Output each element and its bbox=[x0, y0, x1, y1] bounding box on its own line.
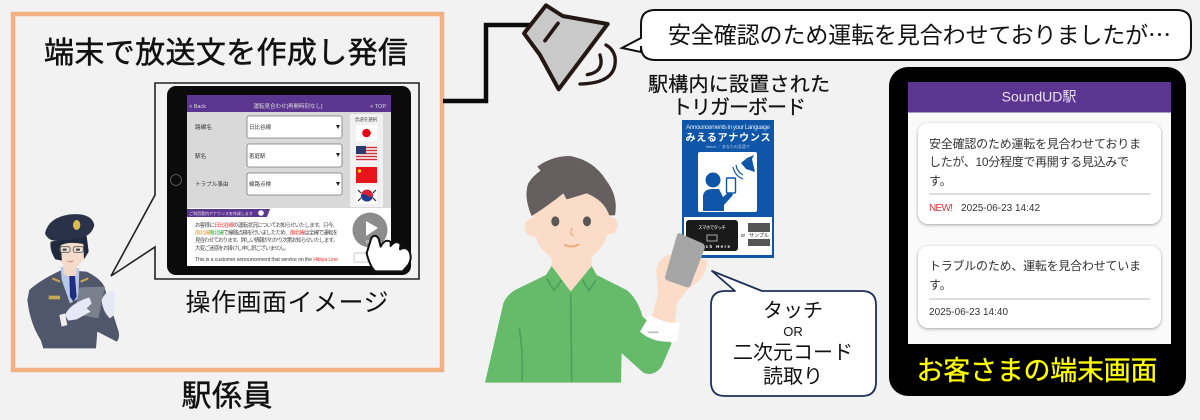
message card: latest: 安全確認のため運転を見合わせておりま bbox=[929, 136, 1141, 151]
callout: touch or QR code: 二次元コード bbox=[733, 341, 853, 364]
message card: latest bbox=[918, 123, 1161, 224]
label: trigger board bbox=[648, 73, 830, 119]
message card: earlier: 2025-06-23 14:40 bbox=[929, 307, 1008, 318]
hair bbox=[526, 156, 616, 216]
device header bbox=[908, 82, 1171, 112]
speech bubble: announcement: 安全確認のため運転を見合わせておりましたが… bbox=[668, 16, 1171, 50]
customer device bbox=[889, 67, 1186, 396]
announcement text band bbox=[187, 209, 270, 217]
illustration: station staff bbox=[27, 214, 119, 348]
announcement text: お客様に日比谷線の運転状況についてお知らせいたします。只今、 bbox=[195, 221, 338, 229]
hand bbox=[652, 255, 707, 325]
illustration: customer with smartphone bbox=[485, 156, 707, 383]
device header: SoundUD駅 bbox=[1002, 89, 1076, 105]
connection wire bbox=[443, 25, 530, 101]
trigger board poster bbox=[682, 120, 774, 258]
tablet app header bbox=[187, 95, 391, 112]
shirt bbox=[485, 266, 672, 383]
announcement text band: ご利用案内アナウンスを作成します bbox=[189, 210, 253, 216]
message card: earlier: トラブルのため、運転を見合わせていま bbox=[929, 258, 1141, 273]
head bbox=[525, 218, 543, 237]
neck bbox=[552, 248, 592, 293]
trigger board poster: スマホでタッチ bbox=[698, 224, 726, 231]
message card: latest: す。 bbox=[929, 174, 952, 188]
tablet app header: < Back bbox=[189, 104, 206, 110]
tablet form: 線路点検 bbox=[249, 180, 272, 188]
label: trigger board: 駅構内に設置された bbox=[648, 73, 830, 96]
tablet app header: < TOP bbox=[370, 104, 386, 110]
label: station staff: 駅係員 bbox=[182, 380, 272, 413]
language flags: 言語を選択 bbox=[355, 116, 378, 123]
message card: earlier bbox=[918, 246, 1161, 328]
tablet form: 路線名 bbox=[195, 123, 212, 131]
trigger board poster: Announcements in your Language bbox=[686, 124, 770, 131]
trigger board poster: Touch Here bbox=[694, 244, 730, 249]
trigger board poster: サンプル bbox=[749, 233, 769, 239]
label: trigger board: トリガーボード bbox=[672, 96, 806, 119]
announcement text: 見合わせております。詳しい情報がわかり次第お知らせいたします。 bbox=[195, 236, 338, 244]
language flags bbox=[350, 114, 383, 207]
play button bbox=[352, 212, 388, 262]
message card: latest: したが、10分程度で再開する見込みで bbox=[929, 154, 1129, 169]
message card: latest: 2025-06-23 14:42 bbox=[961, 203, 1040, 214]
icon: speaker bbox=[524, 5, 615, 89]
announcement text: 南北線南北線で線路点検を行いましたため、南北線は全線で運転を bbox=[195, 228, 338, 236]
callout: touch or QR code: OR bbox=[783, 324, 803, 339]
message card: earlier: す。 bbox=[929, 278, 952, 292]
play button: PLAY bbox=[366, 240, 379, 246]
announcement text: 大変ご迷惑をお掛けし申し訳ございません。 bbox=[195, 244, 289, 252]
callout: touch or QR code: 読取り bbox=[763, 365, 823, 388]
icon: pointing hand bbox=[367, 236, 411, 271]
trigger board poster: literal ／ あなたの言語で bbox=[706, 143, 750, 149]
tablet form: 恵庭駅 bbox=[249, 152, 266, 160]
callout: touch or QR code bbox=[711, 271, 876, 396]
label: operation screen image: 操作画面イメージ bbox=[186, 289, 388, 317]
heading: create and send announcement: 端末で放送文を作成し発信 bbox=[44, 37, 408, 70]
announcement text bbox=[195, 221, 338, 263]
tablet form: 日比谷線 bbox=[249, 123, 272, 131]
device caption: お客さまの端末画面 bbox=[916, 356, 1158, 386]
panel: station staff frame bbox=[13, 14, 442, 370]
speech bubble: announcement bbox=[622, 10, 1191, 60]
tablet app header: 運転見合わせ[再開時刻なし] bbox=[253, 102, 323, 110]
tablet form bbox=[187, 112, 391, 208]
callout: touch or QR code: タッチ bbox=[763, 299, 823, 322]
announcement text: This is a customer announcement that service on the Hibiya Line bbox=[195, 257, 338, 263]
phone bbox=[665, 233, 705, 287]
cuff bbox=[640, 315, 680, 342]
tablet form: 駅名 bbox=[195, 152, 206, 160]
message card: latest: NEW! bbox=[929, 203, 953, 214]
tablet callout frame bbox=[111, 83, 419, 279]
tablet bbox=[167, 86, 411, 275]
trigger board poster: or bbox=[741, 233, 746, 239]
trigger board poster: みえるアナウンス bbox=[686, 132, 770, 144]
icon: person with phone bbox=[703, 155, 755, 211]
tablet form: トラブル事由 bbox=[195, 180, 229, 188]
